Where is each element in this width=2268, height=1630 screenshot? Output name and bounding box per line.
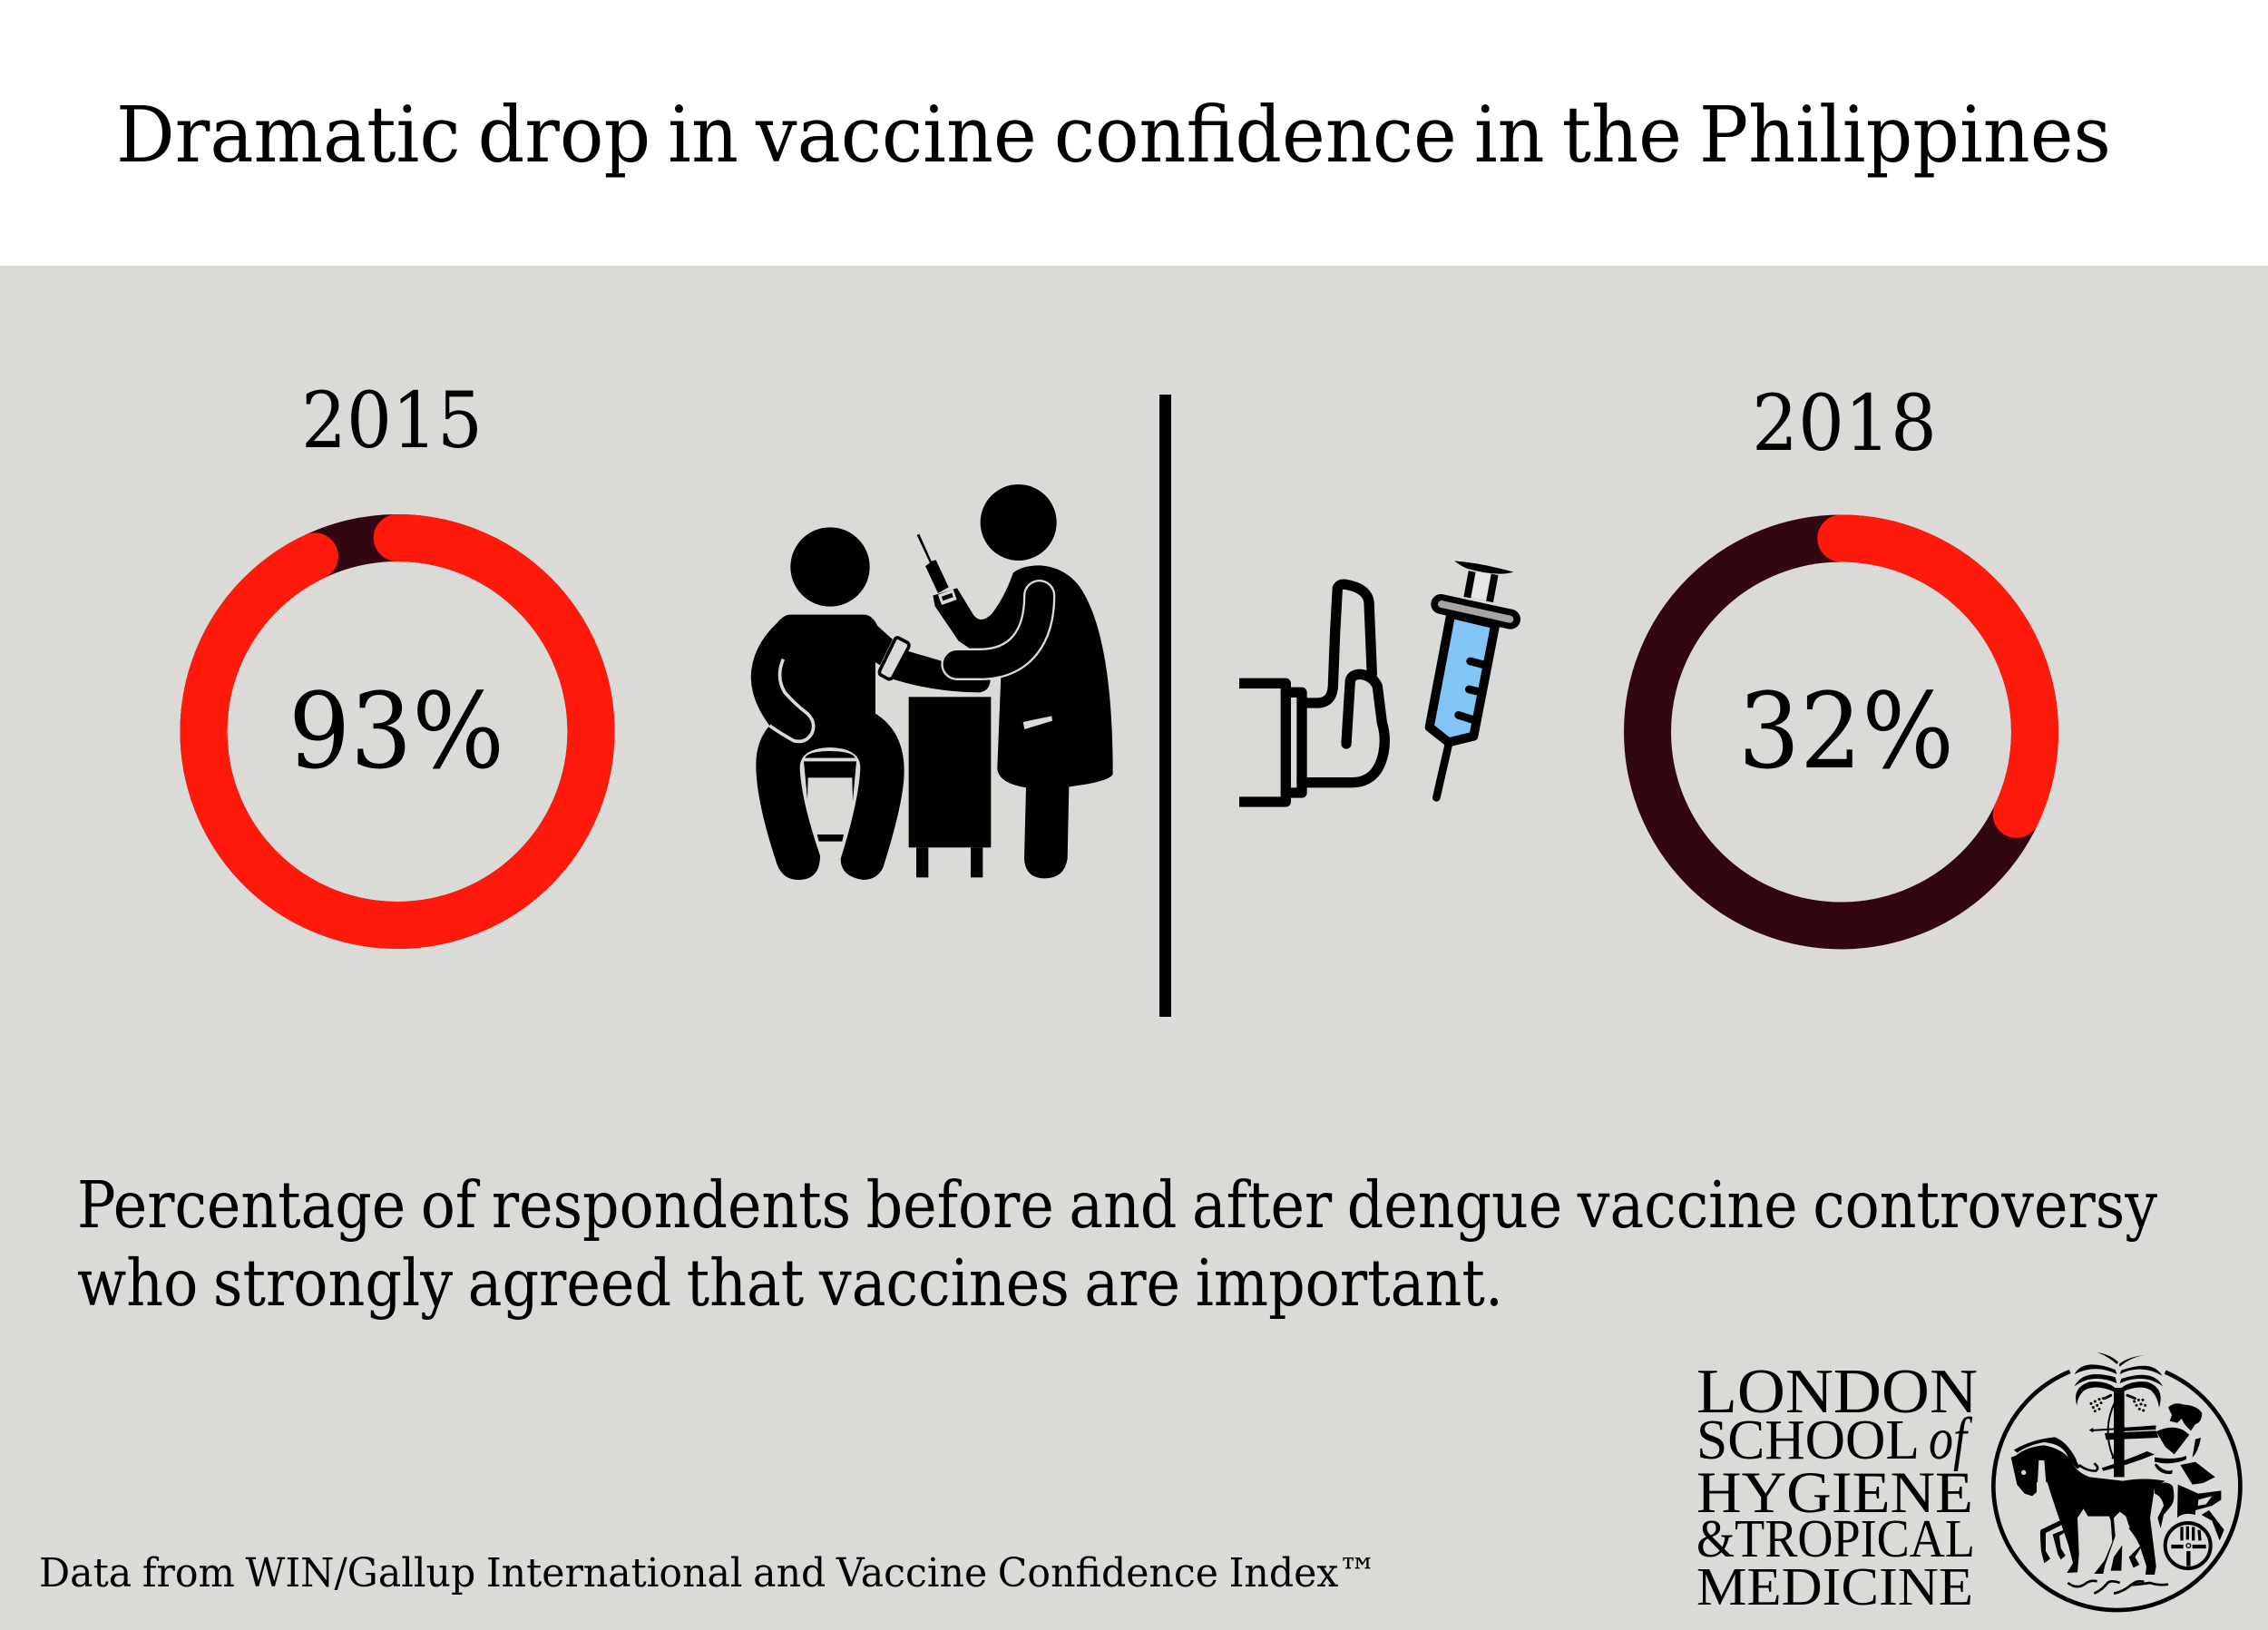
value: 93%: 93% [288,671,504,793]
syringe [1430,561,1513,797]
bow and arrow [2108,1401,2122,1459]
arm band [879,638,909,679]
title: Dramatic drop in vaccine confidence in the Philippines [116,91,2111,181]
patient [751,527,991,880]
dates [2091,1395,2146,1411]
logo: LSHTM seal with horse, chariot and palm [1993,1352,2240,1610]
doctor [909,484,1113,878]
heading: 2018: 2018 [1752,379,1937,469]
logo: LSHTM wordmark: &TROPICAL [1696,1508,1975,1568]
chariot wheel [2165,1523,2211,1568]
logo: LSHTM wordmark: SCHOOL [1696,1410,1920,1471]
heading: 2015: 2015 [301,376,483,466]
text block: description [77,1167,2157,1321]
chariot [2177,1485,2221,1518]
hand refusing [1239,584,1384,802]
logo: LSHTM wordmark [1696,1357,1978,1616]
icon: doctor vaccinating seated patient [751,484,1113,880]
value: 32%: 32% [1738,671,1954,793]
logo: LSHTM wordmark: of [1929,1406,1972,1472]
logo: LSHTM wordmark: LONDON [1696,1357,1978,1427]
icon: refusing hand and syringe [1239,561,1513,802]
donut chart: 2015 93% [203,538,591,925]
snake [2068,1581,2168,1594]
source note: Data from WIN/Gallup International and Vaccine Confidence Index™ [39,1550,1377,1596]
horse [2011,1445,2165,1575]
palm tree [2114,1388,2125,1477]
logo: LSHTM wordmark: HYGIENE [1696,1460,1973,1526]
archer [2168,1403,2202,1430]
divider [1159,395,1171,1017]
logo: LSHTM wordmark: MEDICINE [1696,1557,1973,1616]
text block: description: who strongly agreed that vaccines are important. [77,1245,1503,1321]
donut chart: 2018 32% [1647,539,2035,925]
